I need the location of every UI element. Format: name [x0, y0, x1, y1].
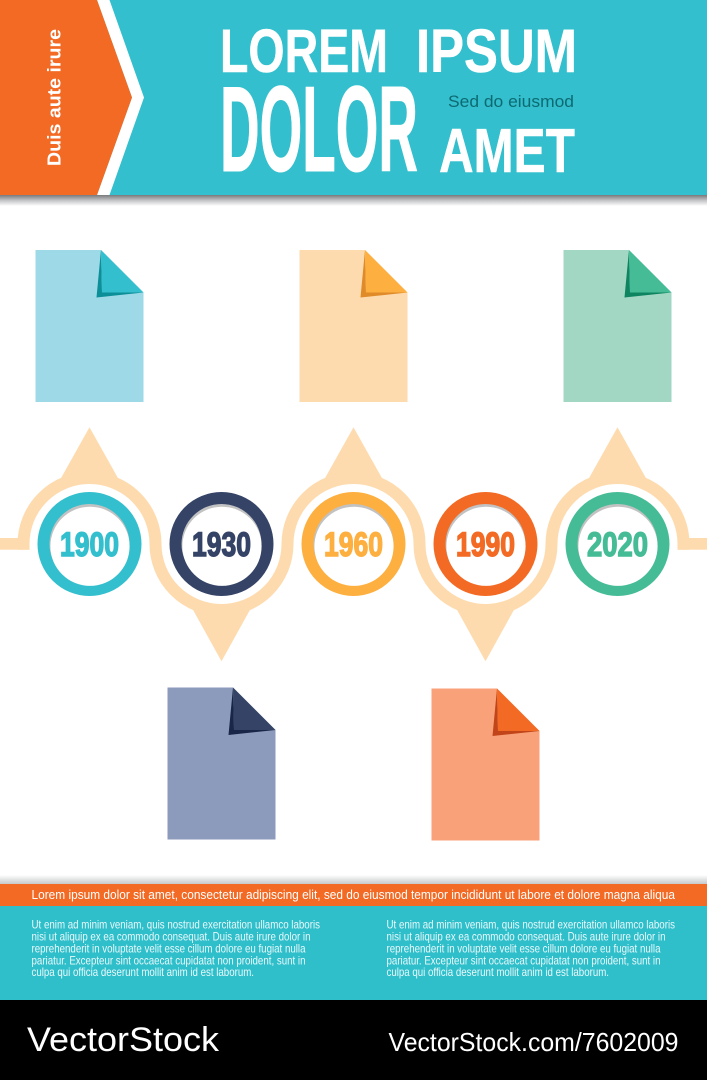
header banner: DOLOR	[220, 61, 418, 197]
marker 1900: 1900	[60, 526, 119, 564]
marker 1930: 1930	[192, 526, 251, 564]
document 5	[432, 688, 540, 840]
timeline ribbon with pointers	[0, 427, 707, 661]
left paragraph: reprehenderit in voluptate velit esse cillum dolore eu fugiat nulla	[32, 942, 306, 956]
marker 1960: 1960	[324, 526, 383, 564]
right paragraph	[386, 918, 675, 979]
orange arrow tab	[0, 0, 132, 195]
marker 1930	[170, 492, 274, 596]
marker 2020: 2020	[587, 526, 648, 564]
right paragraph: culpa qui officia deserunt mollit anim id est laborum.	[386, 965, 609, 979]
document 2	[300, 250, 408, 402]
footer url: VectorStock.com/7602009	[388, 1027, 678, 1057]
marker 2020	[566, 492, 670, 596]
marker 1990	[434, 492, 538, 596]
document 3	[564, 250, 672, 402]
left paragraph: Ut enim ad minim veniam, quis nostrud exercitation ullamco laboris	[32, 918, 320, 932]
footer logo: VectorStock	[27, 1021, 220, 1059]
left paragraph: culpa qui officia deserunt mollit anim id est laborum.	[32, 965, 254, 979]
footer bar	[0, 1000, 707, 1080]
teal text panel	[0, 906, 707, 1000]
left paragraph: nisi ut aliquip ex ea commodo consequat. Duis aute irure dolor in	[32, 930, 310, 944]
white chevron	[97, 0, 144, 195]
left paragraph	[32, 918, 320, 979]
title word: amet: AMET	[439, 117, 575, 186]
left paragraph: pariatur. Excepteur sint occaecat cupidatat non proident, sunt in	[32, 954, 306, 968]
orange summary strip	[0, 875, 707, 906]
title word: ipsum: IPSUM	[416, 17, 577, 85]
marker 1990: 1990	[456, 526, 515, 564]
tab label: Duis aute irure	[44, 29, 64, 166]
subtitle: Sed do eiusmod	[448, 93, 574, 111]
marker 1900	[38, 492, 142, 596]
header banner	[0, 0, 707, 206]
title word: lorem: LOREM	[220, 17, 388, 85]
marker 1960	[302, 492, 406, 596]
document 1	[36, 250, 144, 402]
document 4	[168, 688, 276, 840]
